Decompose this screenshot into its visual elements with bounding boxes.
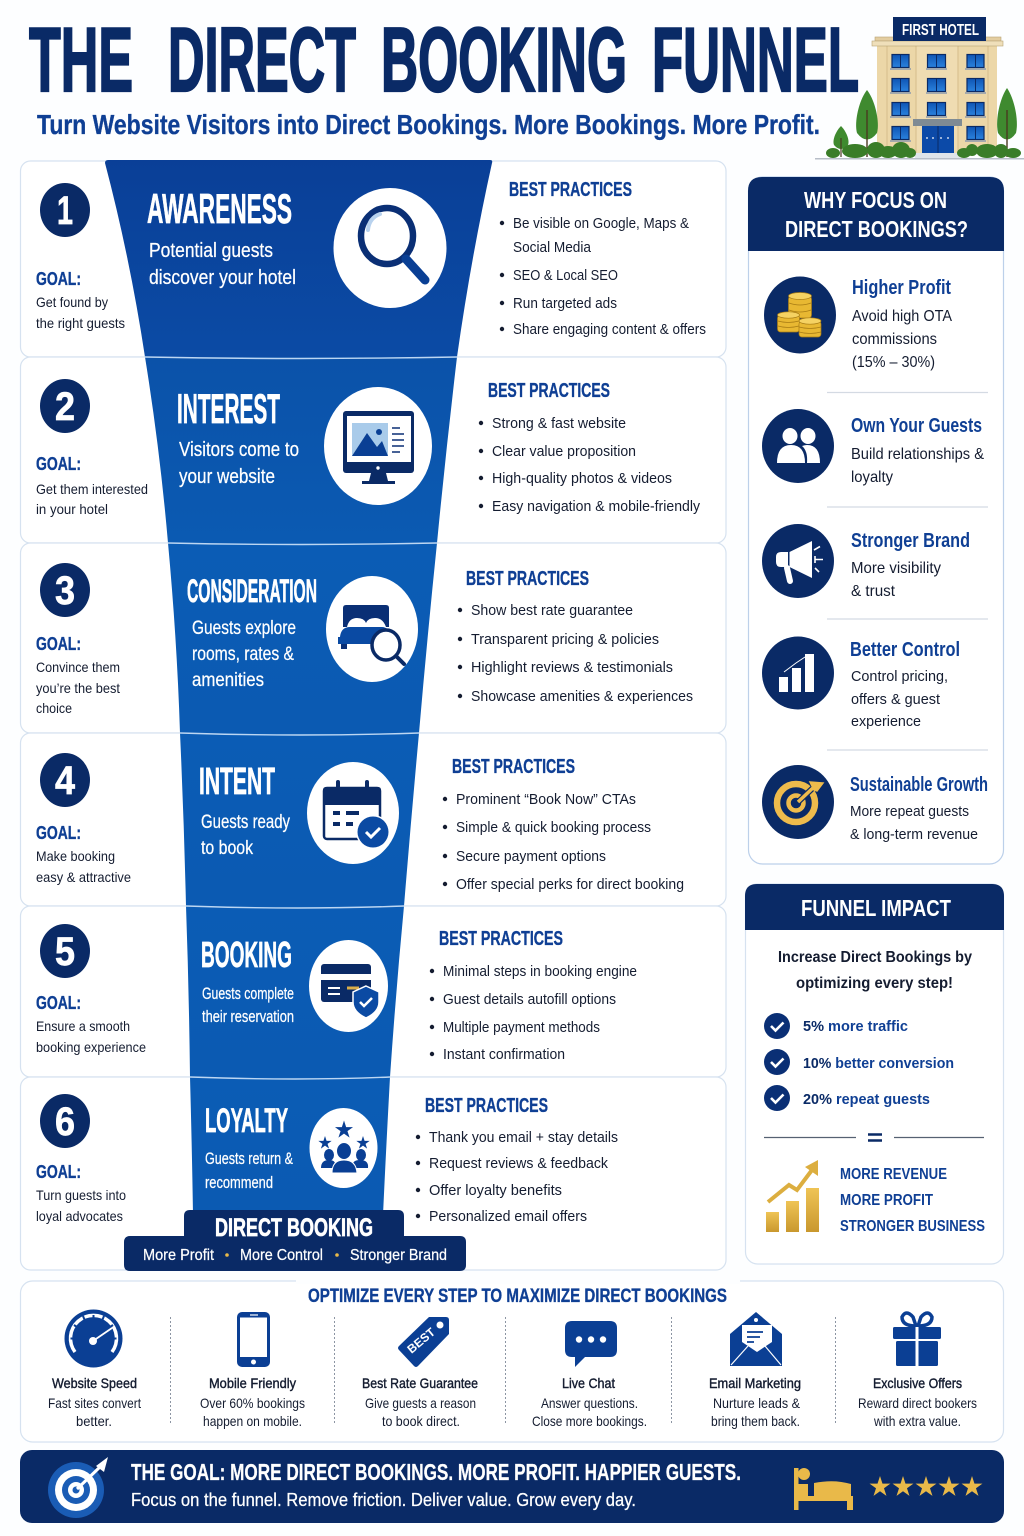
title: [29, 10, 859, 111]
icon: hotel building: [815, 17, 1024, 160]
title: THE: [29, 10, 133, 111]
why heading: DIRECT BOOKINGS?: [785, 216, 968, 242]
tip: mobile friendly: happen on mobile.: [203, 1413, 302, 1429]
best practices 4: Secure payment options: [456, 848, 606, 865]
stage heading awareness: AWARENESS: [147, 185, 292, 232]
step number 1: [40, 183, 90, 237]
equals divider: [764, 1134, 984, 1140]
tip: exclusive offers: with extra value.: [873, 1413, 961, 1429]
stage heading awareness: Potential guests: [149, 240, 273, 262]
panel: optimize every step: [20, 1278, 1004, 1442]
benefit: stronger brand: [762, 524, 970, 600]
icon: calendar check: [307, 762, 399, 864]
icon: five stars: [870, 1476, 982, 1496]
tip: best rate guarantee: to book direct.: [382, 1413, 460, 1429]
goal text 1: GOAL:: [36, 269, 81, 289]
best practices 6: Thank you email + stay details: [429, 1129, 618, 1146]
goal text 6: GOAL:: [36, 1162, 81, 1182]
best practices 1: SEO & Local SEO: [513, 267, 618, 284]
impact result text: MORE REVENUE: [840, 1166, 947, 1183]
goal subline: Focus on the funnel. Remove friction. Deliver value. Grow every day.: [131, 1490, 636, 1510]
stage heading interest: Visitors come to: [179, 439, 299, 461]
panel: why focus on direct bookings: [748, 177, 1004, 864]
callout: direct booking funnel base: [124, 1210, 466, 1271]
tip: mobile friendly: Mobile Friendly: [209, 1375, 296, 1391]
goal text 1: Get found by: [36, 294, 108, 310]
callout: direct booking funnel base: Stronger Brand: [350, 1247, 447, 1264]
tip: best rate guarantee: Best Rate Guarantee: [362, 1375, 478, 1391]
best practices 3: Show best rate guarantee: [471, 602, 633, 619]
best practices 6: BEST PRACTICES: [425, 1095, 548, 1117]
benefit: stronger brand: More visibility: [851, 560, 941, 577]
impact result text: STRONGER BUSINESS: [840, 1218, 985, 1235]
stage heading intent: to book: [201, 838, 253, 859]
step number 5: [40, 924, 90, 978]
stage heading consideration: [187, 573, 317, 691]
benefit: higher profit: commissions: [852, 331, 937, 348]
step number 6: [40, 1094, 90, 1148]
benefit: sustainable growth: & long-term revenue: [850, 826, 978, 843]
best practices 2: [479, 380, 700, 515]
best practices 4: Prominent “Book Now” CTAs: [456, 791, 636, 808]
goal text 3: Convince them: [36, 659, 120, 675]
stage heading consideration: rooms, rates &: [192, 644, 294, 665]
goal text 1: [36, 269, 125, 331]
step number 1: 1: [57, 189, 73, 233]
goal text 3: you’re the best: [36, 680, 120, 696]
best practices 5: Instant confirmation: [443, 1046, 565, 1063]
goal text 5: GOAL:: [36, 993, 81, 1013]
icon: bed: [794, 1468, 853, 1510]
stage heading interest: [177, 385, 299, 488]
goal text 4: easy & attractive: [36, 869, 131, 885]
panel: the goal banner: [20, 1450, 1004, 1523]
best practices 6: Personalized email offers: [429, 1208, 587, 1225]
tip: website speed: better.: [76, 1413, 112, 1429]
step number 2: [40, 379, 90, 433]
goal text 5: booking experience: [36, 1039, 146, 1055]
stage heading booking: Guests complete: [202, 984, 294, 1003]
best practices 1: BEST PRACTICES: [509, 179, 632, 201]
goal text 6: [36, 1162, 126, 1224]
step number 5: 5: [55, 930, 75, 974]
stage heading consideration: Guests explore: [192, 618, 296, 639]
goal text 6: Turn guests into: [36, 1187, 126, 1203]
best practices 3: [458, 568, 693, 705]
goal text 3: choice: [36, 700, 72, 716]
subtitle: Turn Website Visitors into Direct Bookings. More Bookings. More Profit.: [37, 109, 820, 140]
impact checklist: 5% more traffic: [803, 1018, 908, 1035]
tip: email marketing: Nurture leads &: [713, 1395, 801, 1411]
benefit: better control: offers & guest: [851, 691, 941, 708]
goal text 4: GOAL:: [36, 823, 81, 843]
goal headline: THE GOAL: MORE DIRECT BOOKINGS. MORE PROFIT. HAPPIER GUESTS.: [131, 1459, 741, 1485]
benefit: better control: Control pricing,: [851, 668, 948, 685]
goal text 2: Get them interested: [36, 481, 148, 497]
callout: direct booking funnel base: More Profit: [143, 1247, 214, 1264]
best practices 1: Run targeted ads: [513, 295, 617, 312]
impact intro text: [778, 949, 972, 992]
tip: live chat: Answer questions.: [541, 1395, 638, 1411]
best practices 3: Transparent pricing & policies: [471, 631, 659, 648]
best practices 5: Guest details autofill options: [443, 991, 616, 1008]
benefit: higher profit: (15% – 30%): [852, 354, 935, 371]
stage heading intent: INTENT: [199, 761, 275, 803]
step number 6: 6: [55, 1100, 75, 1144]
best practices 2: Easy navigation & mobile-friendly: [492, 498, 700, 515]
stage heading loyalty: LOYALTY: [205, 1102, 288, 1140]
icon: hotel building: FIRST HOTEL: [902, 22, 979, 39]
goal text 6: loyal advocates: [36, 1208, 123, 1224]
tip: live chat: Live Chat: [562, 1375, 615, 1391]
impact checklist: 20% repeat guests: [803, 1091, 930, 1108]
best practices 1: [500, 179, 706, 338]
best practices 3: BEST PRACTICES: [466, 568, 589, 590]
tip: email marketing: Email Marketing: [709, 1375, 801, 1391]
benefit: higher profit: Higher Profit: [852, 277, 951, 299]
step number 4: [40, 753, 90, 807]
panel: funnel impact: [745, 884, 1004, 1264]
icon: credit card shield: [309, 940, 388, 1032]
icon: monitor: [324, 387, 432, 505]
optimize heading: OPTIMIZE EVERY STEP TO MAXIMIZE DIRECT BOOKINGS: [308, 1285, 727, 1307]
chart: funnel shape: [105, 160, 492, 1215]
benefit: sustainable growth: [762, 765, 988, 843]
impact checklist: 10% better conversion: [803, 1055, 954, 1072]
panel: stage 5 booking: [36, 924, 637, 1063]
goal text 3: GOAL:: [36, 634, 81, 654]
goal text 2: [36, 454, 148, 517]
impact intro text: optimizing every step!: [796, 975, 953, 992]
stage heading intent: [199, 761, 290, 859]
goal text 5: Ensure a smooth: [36, 1018, 130, 1034]
benefit: stronger brand: & trust: [851, 583, 896, 600]
stage heading booking: [201, 934, 294, 1026]
benefit: better control: [762, 636, 960, 730]
tip: best rate guarantee: Give guests a reason: [365, 1395, 476, 1411]
benefit: own your guests: Own Your Guests: [851, 415, 982, 437]
icon: target with arrow: [48, 1457, 108, 1518]
callout: direct booking funnel base: DIRECT BOOKING: [215, 1214, 373, 1242]
tip: exclusive offers: [858, 1313, 977, 1429]
tip: live chat: Close more bookings.: [532, 1413, 647, 1429]
stage heading loyalty: Guests return &: [205, 1149, 293, 1168]
stage heading loyalty: recommend: [205, 1173, 273, 1192]
step number 4: 4: [55, 759, 76, 803]
benefit: sustainable growth: More repeat guests: [850, 803, 969, 820]
stage heading loyalty: [205, 1102, 293, 1192]
icon: magnifier: [334, 188, 446, 308]
best practices 6: Request reviews & feedback: [429, 1155, 608, 1172]
tip: mobile friendly: [200, 1312, 305, 1429]
tip: email marketing: [709, 1312, 801, 1429]
benefit: stronger brand: Stronger Brand: [851, 530, 970, 552]
benefit: own your guests: Build relationships &: [851, 446, 984, 463]
goal text 2: in your hotel: [36, 501, 108, 517]
tip: email marketing: bring them back.: [711, 1413, 800, 1429]
panel: stage 2 interest: [36, 379, 700, 517]
tip: website speed: Fast sites convert: [48, 1395, 141, 1411]
best practices 5: [430, 928, 637, 1063]
stage heading interest: your website: [179, 466, 275, 488]
panel: stage 3 consideration: [36, 563, 693, 716]
benefit: better control: Better Control: [850, 639, 960, 661]
best practices 4: Offer special perks for direct booking: [456, 876, 684, 893]
goal text 3: [36, 634, 120, 716]
best practices 2: Strong & fast website: [492, 415, 626, 432]
callout: direct booking funnel base: More Control: [240, 1247, 323, 1264]
funnel impact heading: [745, 884, 1004, 930]
tip: exclusive offers: Reward direct bookers: [858, 1395, 977, 1411]
goal text 4: Make booking: [36, 848, 115, 864]
stage heading intent: Guests ready: [201, 812, 290, 833]
panel: stage 1 awareness: [36, 179, 706, 338]
best practices 3: Highlight reviews & testimonials: [471, 659, 673, 676]
stage heading interest: INTEREST: [177, 385, 280, 432]
best practices 4: BEST PRACTICES: [452, 756, 575, 778]
tip: website speed: [48, 1310, 141, 1429]
goal text 2: GOAL:: [36, 454, 81, 474]
panel: stage 3 consideration: CONSIDERATION: [187, 573, 317, 609]
best practices 2: Clear value proposition: [492, 443, 636, 460]
icon: bed with magnifier: [326, 576, 418, 682]
best practices 5: Minimal steps in booking engine: [443, 963, 637, 980]
panel: stage 4 intent: [36, 753, 684, 893]
benefit: own your guests: loyalty: [851, 469, 893, 486]
impact result text: MORE PROFIT: [840, 1192, 933, 1209]
benefit: better control: experience: [851, 713, 921, 730]
icon: gold growth chart: [766, 1160, 819, 1232]
why heading: [748, 177, 1004, 251]
best practices 1: Be visible on Google, Maps &: [513, 215, 689, 232]
best practices 6: Offer loyalty benefits: [429, 1182, 562, 1199]
why heading: WHY FOCUS ON: [804, 187, 947, 213]
tip: best rate guarantee: [362, 1317, 478, 1429]
impact intro text: Increase Direct Bookings by: [778, 949, 972, 966]
best practices 4: Simple & quick booking process: [456, 819, 651, 836]
benefit: higher profit: [764, 276, 952, 371]
step number 2: 2: [55, 385, 75, 429]
stage heading awareness: [147, 185, 296, 289]
title: FUNNEL: [652, 10, 859, 111]
title: DIRECT: [168, 10, 356, 111]
benefit: own your guests: [762, 409, 984, 486]
title: BOOKING: [381, 10, 627, 111]
goal text 5: [36, 993, 146, 1055]
best practices 2: BEST PRACTICES: [488, 380, 610, 402]
tip: best rate guarantee: BEST: [404, 1325, 438, 1356]
stage heading booking: BOOKING: [201, 934, 292, 975]
icon: guests with stars: [310, 1108, 378, 1188]
best practices 5: BEST PRACTICES: [439, 928, 563, 950]
goal text 4: [36, 823, 131, 885]
tip: mobile friendly: Over 60% bookings: [200, 1395, 305, 1411]
panel: stage 6 loyalty: [36, 1094, 618, 1225]
impact result text: [840, 1166, 985, 1235]
stage heading booking: their reservation: [202, 1007, 294, 1026]
best practices 5: Multiple payment methods: [443, 1019, 600, 1036]
tip: exclusive offers: Exclusive Offers: [873, 1375, 962, 1391]
funnel impact heading: FUNNEL IMPACT: [801, 895, 951, 921]
benefit: higher profit: Avoid high OTA: [852, 308, 952, 325]
best practices 1: Social Media: [513, 239, 592, 256]
tip: website speed: Website Speed: [52, 1375, 137, 1391]
tip: live chat: [532, 1321, 647, 1429]
best practices 6: [416, 1095, 618, 1225]
best practices 2: High-quality photos & videos: [492, 470, 672, 487]
best practices 4: [443, 756, 684, 893]
goal text 1: the right guests: [36, 315, 125, 331]
stage heading awareness: discover your hotel: [149, 267, 296, 289]
stage heading consideration: amenities: [192, 670, 264, 691]
step number 3: 3: [55, 569, 75, 613]
step number 3: [40, 563, 90, 617]
best practices 3: Showcase amenities & experiences: [471, 688, 693, 705]
impact checklist: [764, 1013, 954, 1111]
panel: funnel stage rows background: [20, 161, 726, 1270]
best practices 1: Share engaging content & offers: [513, 321, 706, 338]
